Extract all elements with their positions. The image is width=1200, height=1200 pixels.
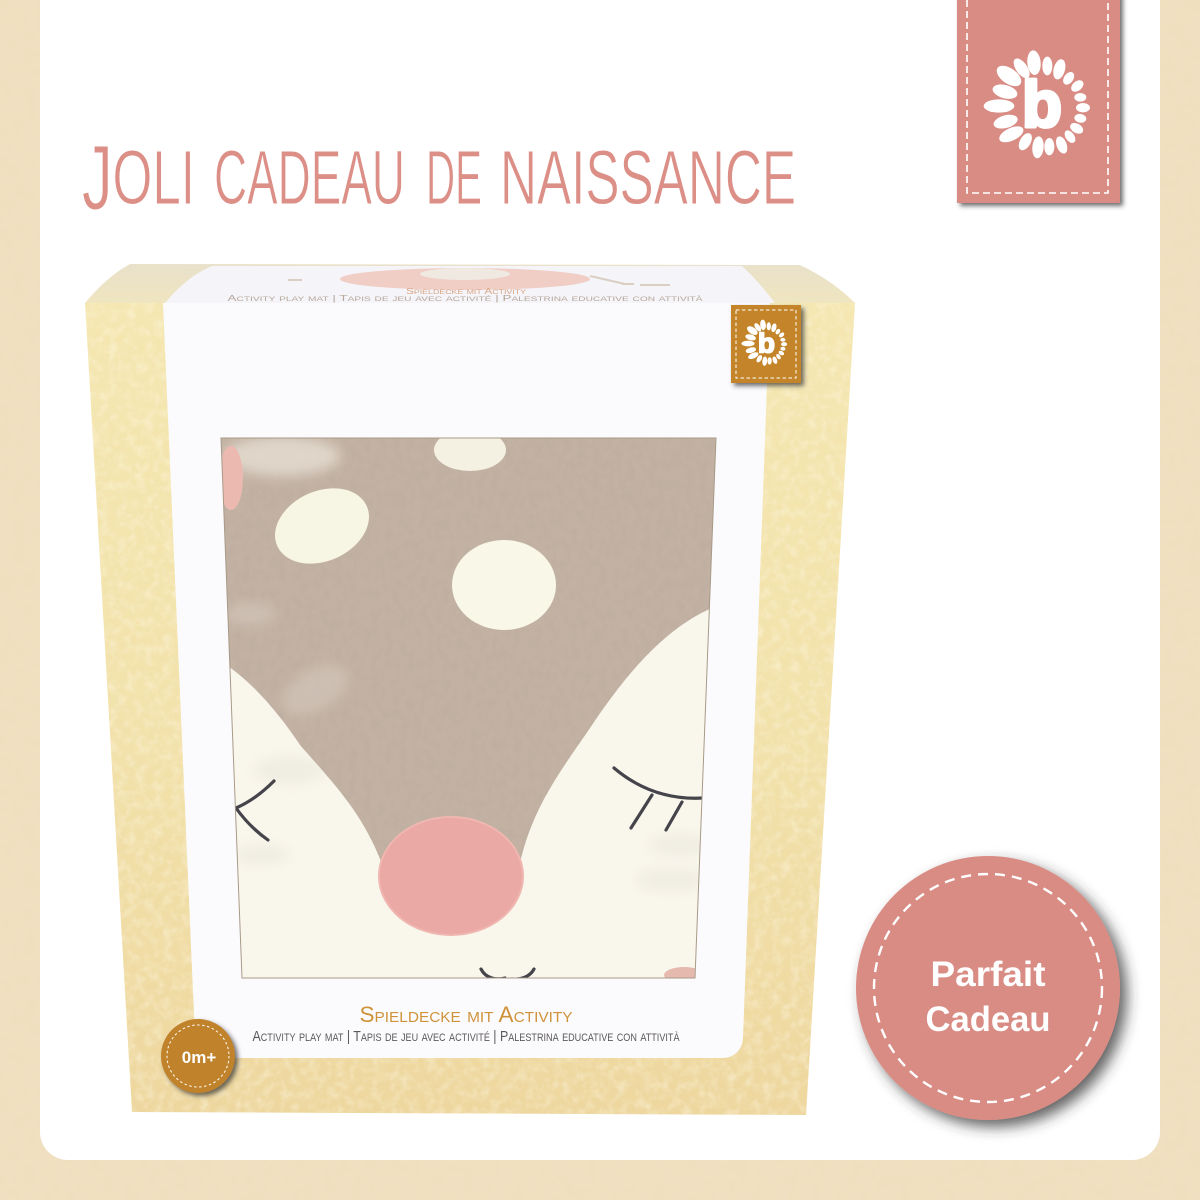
icon: small flower logo: b (758, 327, 775, 358)
box top face (85, 264, 855, 303)
reflections on the window (228, 602, 346, 714)
title: OLI (113, 135, 195, 221)
brand tag top right (957, 0, 1120, 203)
product window: fawn blanket (215, 429, 725, 984)
box label heading: Spieldecke mit Activity (360, 1002, 572, 1027)
callout badge (856, 856, 1120, 1120)
sleeve top (165, 266, 775, 303)
pink corner (664, 967, 695, 978)
gift box (80, 264, 860, 1120)
window edge (221, 438, 716, 978)
light fur patch (224, 436, 340, 476)
spots (263, 429, 556, 630)
sleeve top: Spieldecke mit Activity (406, 287, 526, 296)
callout badge: Cadeau (926, 1000, 1050, 1039)
title: NAISSANCE (500, 135, 796, 221)
nose (379, 817, 523, 935)
title (82, 127, 796, 229)
small brand tag (731, 305, 801, 383)
title: J (82, 127, 113, 229)
age badge: 0m+ (182, 1048, 216, 1067)
title: CADEAU (214, 135, 405, 221)
icon: brand flower logo (984, 50, 1090, 159)
box label languages: Activity play mat | Tapis de jeu avec activité | Palestrina educative con attività (252, 1028, 680, 1045)
pink flower (222, 446, 243, 510)
fawn fur (215, 432, 725, 872)
icon: brand flower logo: b (1022, 68, 1062, 141)
age badge (161, 1019, 235, 1093)
sleeve top: Activity play mat | Tapis de jeu avec activité | Palestrina educative con attività (228, 294, 702, 303)
box front face (80, 300, 860, 1120)
callout badge: Parfait (930, 955, 1046, 994)
faint cheek marks (234, 756, 710, 890)
eyes and smile (236, 768, 704, 979)
white sleeve with window (163, 303, 770, 1058)
title: DE (426, 135, 482, 221)
